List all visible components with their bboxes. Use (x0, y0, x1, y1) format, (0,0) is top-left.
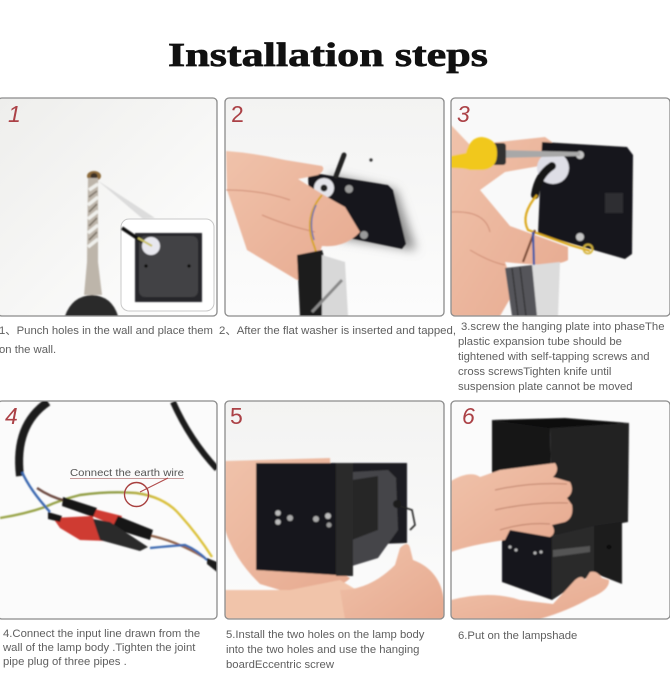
caption: step 3: tightened with self-tapping screws and (458, 351, 650, 363)
icon: lampshade (492, 418, 629, 429)
caption: step 5: boardEccentric screw (226, 659, 335, 671)
plate shadow (320, 175, 416, 250)
step number 1: 1 (8, 101, 21, 127)
caption: step 1: 1、Punch holes in the wall and place them (0, 325, 213, 337)
caption: step 3: 3.screw the hanging plate into phaseThe (461, 321, 664, 333)
panel: step 1 (0, 98, 217, 316)
step number 3: 3 (457, 101, 470, 127)
icon: hand behind (451, 125, 568, 316)
icon: driver box (532, 261, 560, 316)
inset: mounting plate (121, 219, 214, 311)
caption: step 1: on the wall. (0, 344, 56, 356)
caption: step 4: 4.Connect the input line drawn from the (3, 628, 200, 640)
icon: holding hand left (225, 458, 350, 590)
callout: earth wire: Connect the earth wire (70, 467, 184, 479)
step number 2: 2 (231, 101, 244, 127)
caption: step 3: cross screwsTighten knife until (458, 366, 611, 378)
wires (22, 472, 50, 512)
callout: earth wire (70, 467, 184, 506)
panel: step 4 (0, 401, 217, 619)
icon: lamp body below (502, 530, 552, 600)
icon: hand under lamp (451, 572, 609, 619)
icon: red connectors (92, 508, 123, 526)
icon: hand (226, 151, 360, 280)
icon: black cables (19, 402, 48, 476)
icon: eccentric screw (406, 506, 417, 532)
wires (310, 195, 322, 272)
icon: hand on shade (451, 463, 572, 552)
title: Installation steps (168, 37, 488, 74)
panel: step 6 (451, 401, 670, 619)
caption: step 4: pipe plug of three pipes . (3, 656, 127, 668)
caption: step 4: wall of the lamp body .Tighten the joint (2, 642, 196, 654)
icon: yellow-green earth wire (0, 492, 212, 557)
panel: step 2 (225, 98, 444, 316)
caption: step 5: into the two holes and use the hanging (226, 644, 419, 656)
step number 5: 5 (230, 403, 243, 429)
caption: step 2: 2、After the flat washer is inserted and tapped, (219, 325, 456, 337)
panel: step 5 (225, 401, 444, 619)
icon: driver box (296, 249, 324, 316)
step number 6: 6 (462, 403, 475, 429)
icon: hanging plate (308, 172, 406, 249)
wires (525, 195, 590, 251)
icon: right hand (340, 544, 444, 619)
icon: lamp body (353, 463, 407, 545)
icon: hanging plate (538, 142, 633, 259)
caption: step 5: 5.Install the two holes on the lamp body (226, 629, 425, 641)
caption: step 3: plastic expansion tube should be (458, 336, 622, 348)
panel: step 3 (451, 98, 670, 316)
step number 4: 4 (5, 403, 18, 429)
caption: step 6: 6.Put on the lampshade (458, 630, 577, 642)
icon: drill bit in wall (65, 171, 155, 316)
caption: step 3: suspension plate cannot be moved (458, 381, 633, 393)
icon: screwdriver (500, 150, 580, 158)
